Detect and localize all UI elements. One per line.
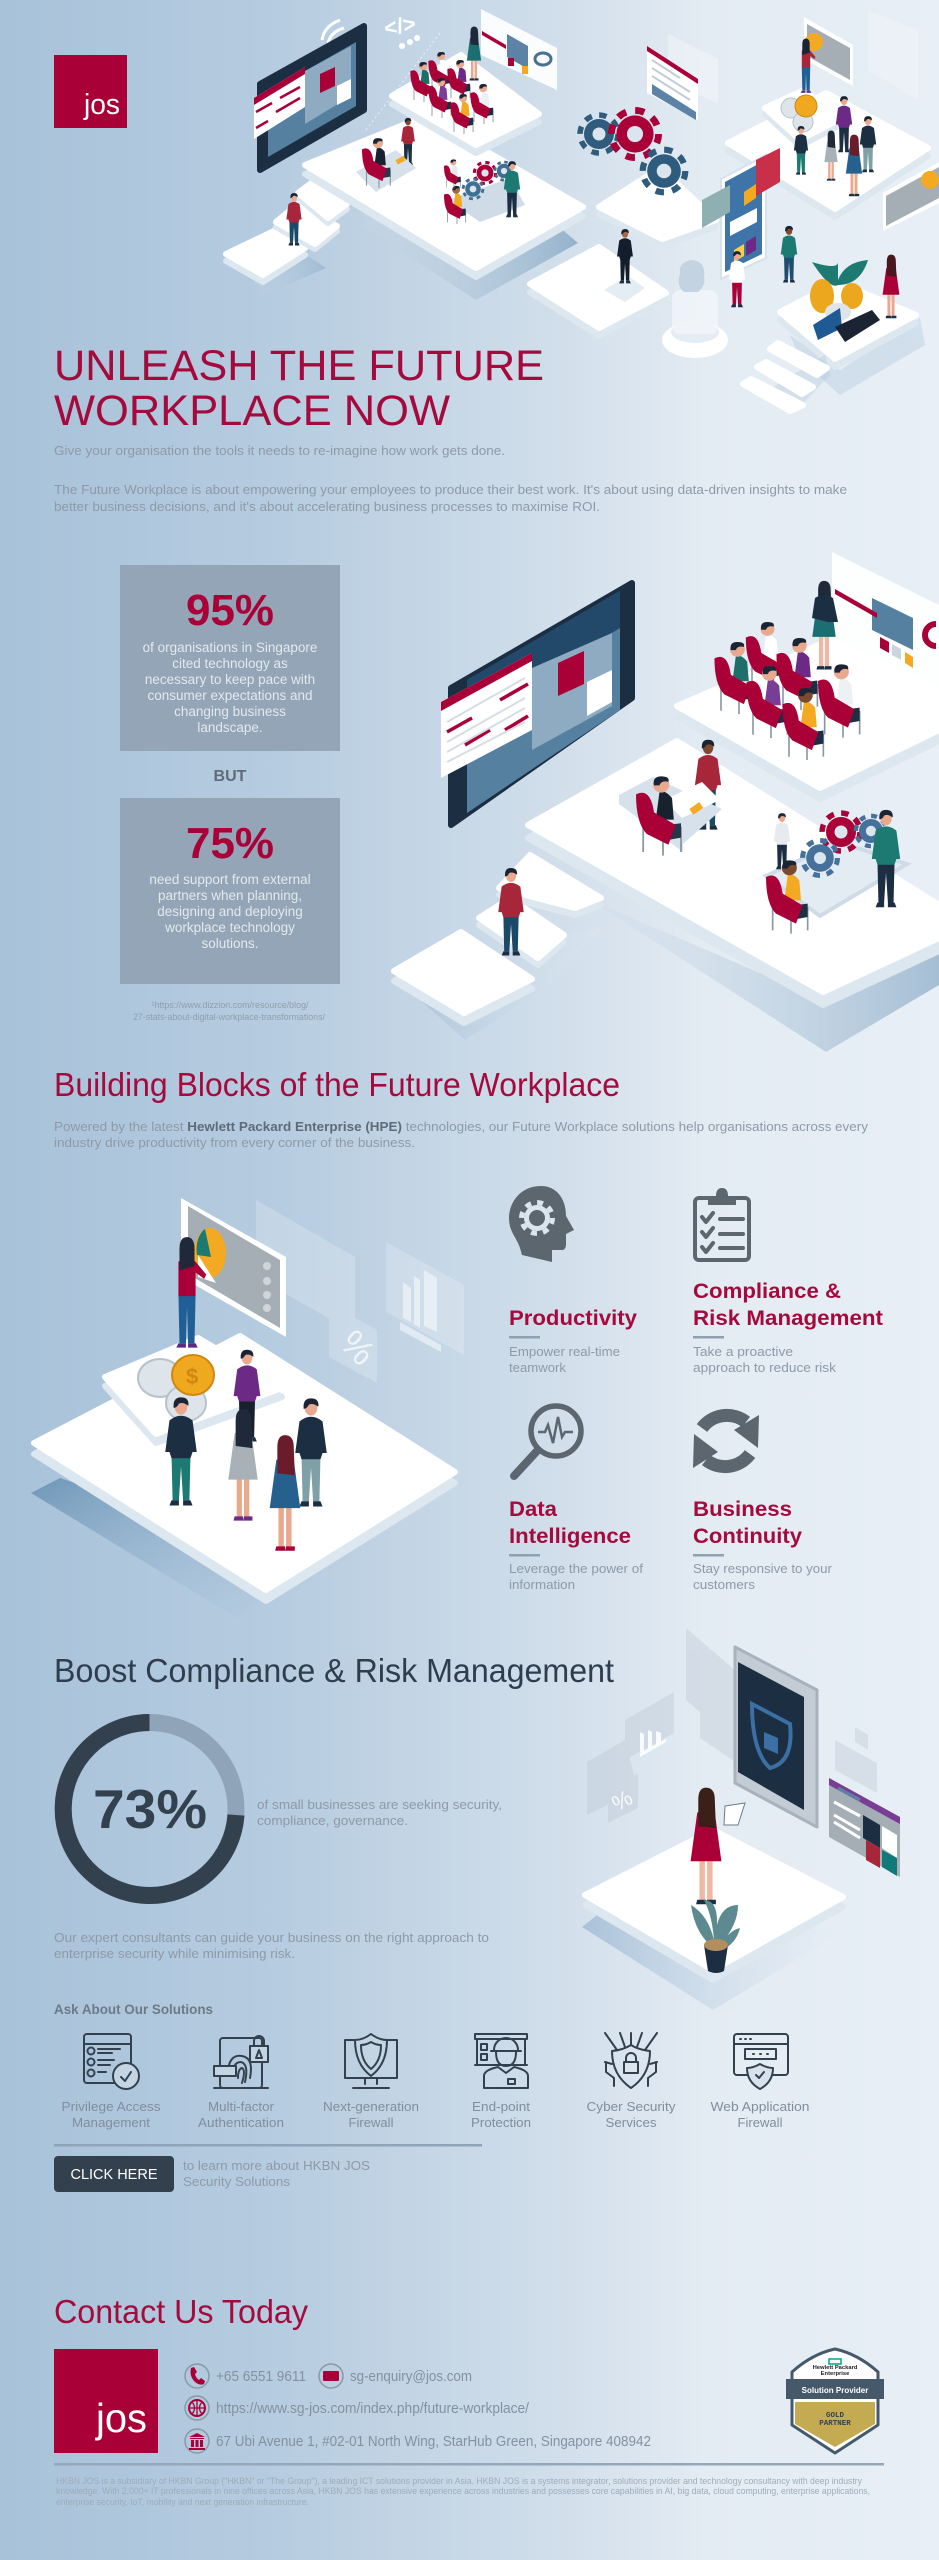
logo: jos: jos [83, 89, 120, 121]
logo: jos large [54, 2349, 158, 2453]
illustration: team around coins [31, 1198, 464, 1620]
block: business continuity [693, 1415, 833, 1592]
platform: gears [599, 168, 716, 246]
footer text: HKBN JOS is a subsidiary of HKBN Group ("HKBN" or "The Group"), a leading ICT solutions provider in Asia. HKBN JOS is a systems integrator, solutions provider and technology consultancy with deep industry [56, 2476, 862, 2487]
badge: gold partner: Enterprise [821, 2371, 850, 2377]
panel: 95% stat: of organisations in Singapore [143, 640, 317, 655]
footer rule [54, 2463, 884, 2466]
contact: web: https://www.sg-jos.com/index.php/future-workplace/ [216, 2401, 530, 2417]
phone with app tiles [702, 148, 780, 279]
title: WORKPLACE NOW [54, 387, 450, 435]
panel: 75% stat: workplace technology [164, 920, 295, 935]
icon: browser shield [734, 2034, 788, 2089]
footer text: enterprise security, IoT, mobility and next generation infrastructure. [56, 2497, 309, 2508]
plant and coins [810, 260, 880, 342]
panel: 95% stat [120, 565, 340, 751]
heading: building blocks: Building Blocks of the Future Workplace [54, 1066, 620, 1103]
title [54, 342, 544, 435]
shadow [31, 1478, 300, 1620]
person: presenter [812, 581, 838, 669]
platform: coins and cards [780, 282, 925, 395]
presentation wall [832, 552, 939, 720]
solution: cyber security [586, 2033, 676, 2130]
button: click here [54, 2156, 174, 2192]
desk with two people [356, 118, 416, 192]
block: data intelligence: Leverage the power of [509, 1561, 643, 1576]
panel: 75% stat: 75% [186, 819, 274, 868]
steps: entry [394, 855, 605, 1040]
icon: fingerprint [214, 2036, 268, 2088]
panel: 75% stat: need support from external [149, 872, 311, 887]
text: consultants: Our expert consultants can guide your business on the right approach to [54, 1930, 489, 1945]
meeting table with gears [444, 159, 525, 224]
icon: head with gear [509, 1186, 574, 1262]
source note: 27-stats-about-digital-workplace-transformations/ [133, 1012, 325, 1023]
block: business continuity: Continuity [693, 1525, 802, 1548]
badge: gold partner: Hewlett Packard [813, 2365, 858, 2371]
text: consultants [54, 1930, 489, 1961]
contact: email [319, 2364, 472, 2388]
desk and two people [619, 740, 722, 856]
contact: email: sg-enquiry@jos.com [350, 2369, 472, 2385]
block: compliance: Risk Management [693, 1307, 883, 1330]
platform: upper [105, 1338, 282, 1443]
large tablet [441, 583, 632, 825]
platform: right team [728, 91, 928, 217]
panel: 95% stat: consumer expectations and [147, 688, 313, 703]
solution: privilege access: Privilege Access [62, 2099, 161, 2114]
bar chart and percent glyph: % [607, 1785, 637, 1816]
badge: gold partner: PARTNER [819, 2420, 851, 2428]
solution: web application firewall [710, 2034, 810, 2130]
panel: 75% stat: partners when planning, [158, 888, 302, 903]
gears group [580, 110, 685, 192]
block: compliance [693, 1188, 883, 1375]
chart on panel [400, 1270, 441, 1352]
heading: contact: Contact Us Today [54, 2293, 308, 2330]
panel: 75% stat: designing and deploying [157, 904, 303, 919]
section illustration: workplace floors [394, 552, 939, 1052]
icon: wifi [322, 20, 346, 46]
footer text: knowledge. With 2,000+ IT professionals in nine offices across Asia, HKBN JOS has extensive experience across industries and possesses core capabilities in AI, big data, cloud computing, enterprise applications, [56, 2486, 870, 2497]
text: learn more [183, 2158, 370, 2189]
solution: multi-factor: Authentication [198, 2115, 284, 2130]
icon: checklist [84, 2034, 139, 2089]
person: woman [691, 1788, 721, 1904]
block: productivity: Productivity [509, 1307, 637, 1330]
contact: address [185, 2429, 651, 2453]
text: consultants: enterprise security while minimising risk. [54, 1946, 295, 1961]
block: compliance: approach to reduce risk [693, 1360, 837, 1375]
solution: privilege access [62, 2034, 161, 2130]
platform: lower floor [528, 741, 939, 1052]
meeting table and gears [766, 810, 907, 934]
solution: web application firewall: Web Application [710, 2099, 810, 2114]
panel: 95% stat: landscape. [197, 720, 263, 735]
solution: endpoint: End-point [472, 2099, 530, 2114]
button: click here: CLICK HERE [70, 2167, 158, 2183]
phone [735, 1647, 817, 1827]
people: right team [794, 39, 876, 196]
coins [138, 1355, 214, 1421]
tablet [254, 26, 364, 170]
block: data intelligence [509, 1406, 643, 1592]
cloud in glass [662, 260, 728, 358]
icon: connection dots [366, 33, 440, 130]
people: phone area [729, 226, 797, 307]
document panel [647, 34, 718, 120]
intro text [54, 443, 847, 514]
building blocks intro [54, 1119, 869, 1150]
steps: bottom right [743, 343, 830, 412]
block: data intelligence: Intelligence [509, 1525, 631, 1548]
block: data intelligence: Data [509, 1498, 557, 1521]
illustration: security phone [582, 1628, 900, 2010]
intro text: The Future Workplace is about empowering your employees to produce their best work. It's about using data-driven insights to make [54, 482, 847, 497]
badge: gold partner: GOLD [826, 2412, 844, 2420]
solution: multi-factor: Multi-factor [208, 2099, 275, 2114]
icon: monitor shield [345, 2034, 397, 2088]
platform: main floor [305, 116, 583, 300]
icon: code brackets: </> [382, 11, 418, 41]
platform: classroom [392, 55, 539, 153]
solution: cyber security: Cyber Security [586, 2099, 676, 2114]
block: compliance: Take a proactive [693, 1344, 793, 1359]
block: business continuity: customers [693, 1577, 756, 1592]
people: classroom [410, 27, 493, 134]
panel: 95% stat: cited technology as [172, 656, 288, 671]
badge: gold partner [786, 2349, 884, 2453]
block: business continuity: Stay responsive to your [693, 1561, 833, 1576]
contact: phone [185, 2364, 306, 2388]
text: 73% description: compliance, governance. [257, 1813, 408, 1828]
percent sign: % [332, 1322, 384, 1373]
solution: web application firewall: Firewall [738, 2115, 783, 2130]
intro text: Give your organisation the tools it needs to re-imagine how work gets done. [54, 443, 505, 458]
icon: sync arrows [693, 1415, 759, 1468]
bar chart and percent glyph [607, 1730, 666, 1816]
person: suit man [617, 229, 633, 283]
person: woman with phone [883, 255, 899, 318]
platform: large [34, 1336, 455, 1601]
shadow [582, 1905, 846, 2010]
logo: jos [54, 55, 127, 128]
contact: web [185, 2396, 530, 2420]
block: compliance: Compliance & [693, 1280, 841, 1303]
block: business continuity: Business [693, 1498, 792, 1521]
platform [585, 1830, 843, 1980]
intro text: better business decisions, and it's about accelerating business processes to maximise ROI. [54, 499, 600, 514]
panel: 95% stat: necessary to keep pace with [145, 672, 315, 687]
text: but: BUT [214, 768, 247, 785]
icon: magnifier [514, 1406, 581, 1476]
people [165, 1237, 327, 1551]
source note: ¹https://www.dizzion.com/resource/blog/ [152, 1000, 309, 1011]
side screen [883, 162, 939, 231]
icon: clipboard [695, 1188, 749, 1260]
solution: endpoint: Protection [471, 2115, 531, 2130]
people: seated audience [714, 581, 860, 760]
subheading: ask about: Ask About Our Solutions [54, 2001, 213, 2017]
divider rule [54, 2144, 482, 2146]
title: UNLEASH THE FUTURE [54, 342, 544, 390]
solution: multi-factor [198, 2036, 284, 2130]
donut chart: 73% [63, 1722, 236, 1896]
source note [133, 1000, 325, 1023]
faded panels [587, 1628, 877, 1823]
phone in hand [724, 1803, 745, 1825]
solution: firewall [323, 2034, 419, 2130]
plant [691, 1900, 740, 1973]
faded chart panel [868, 10, 918, 100]
logo: jos large: jos [95, 2395, 147, 2441]
heading: boost compliance: Boost Compliance & Risk Management [54, 1652, 614, 1689]
text: 73% description [257, 1797, 502, 1828]
text: 73% description: of small businesses are seeking security, [257, 1797, 502, 1812]
icon: engineer [475, 2034, 528, 2088]
coins: $ [186, 1364, 198, 1389]
block: productivity: Empower real-time [509, 1344, 620, 1359]
person: climbing stairs [286, 193, 302, 245]
coins [781, 95, 817, 132]
solution: endpoint [471, 2034, 531, 2130]
solution: firewall: Next-generation [323, 2099, 419, 2114]
contact: phone: +65 6551 9611 [216, 2369, 306, 2385]
faded panels [256, 1200, 464, 1383]
block: productivity [509, 1186, 637, 1375]
icon: circuit shield [605, 2033, 657, 2088]
platform: suit man [530, 247, 666, 336]
donut chart: 73%: 73% [93, 1778, 207, 1840]
building blocks intro: industry drive productivity from every corner of the business. [54, 1135, 415, 1150]
solution: cyber security: Services [606, 2115, 657, 2130]
panel: 75% stat [120, 798, 340, 984]
badge: gold partner: Solution Provider [802, 2386, 868, 2395]
platform: upper floor [677, 640, 939, 799]
panel: 95% stat: changing business [174, 704, 286, 719]
building blocks intro: Powered by the latest Hewlett Packard Enterprise (HPE) technologies, our Future Workplace solutions help organisations across every [54, 1119, 869, 1134]
panel: 75% stat: solutions. [201, 936, 259, 951]
contact: address: 67 Ubi Avenue 1, #02-01 North Wing, StarHub Green, Singapore 408942 [216, 2434, 651, 2450]
footer text [56, 2476, 870, 2508]
platform: stairs [226, 178, 347, 296]
solution: privilege access: Management [72, 2115, 150, 2130]
browser panel [829, 1778, 900, 1877]
screen with pie [181, 1198, 286, 1337]
solution: firewall: Firewall [348, 2115, 394, 2130]
hero illustration [226, 9, 939, 412]
text: learn more: Security Solutions [183, 2174, 291, 2189]
block: productivity: teamwork [509, 1360, 566, 1375]
block: data intelligence: information [509, 1577, 575, 1592]
person: presenter [467, 27, 481, 80]
panel: 95% stat: 95% [186, 586, 274, 635]
presentation wall [481, 9, 557, 90]
screen: pie chart [804, 17, 853, 86]
person: climbing steps [498, 868, 524, 956]
text: learn more: to learn more about HKBN JOS [183, 2158, 370, 2173]
